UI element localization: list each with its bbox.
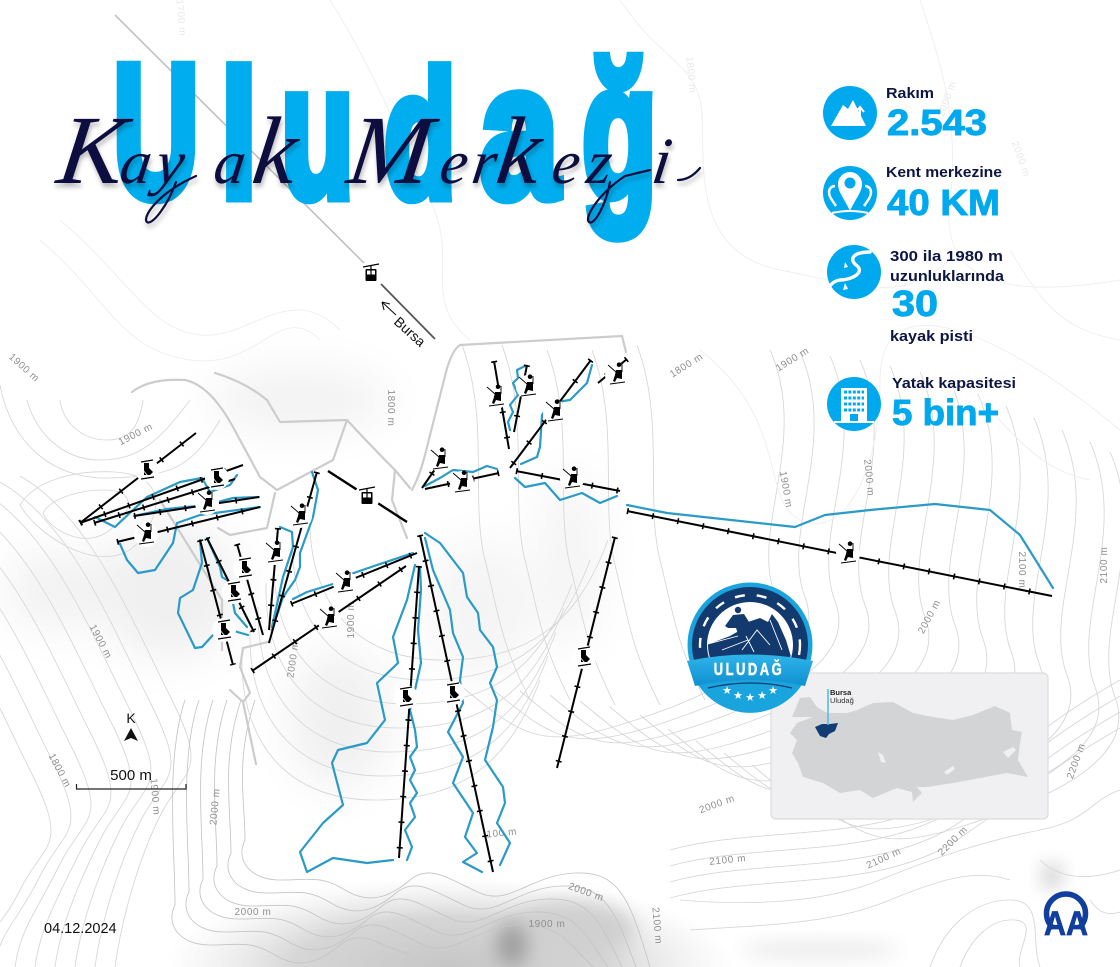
elevation labels: 2000 m: [916, 598, 943, 636]
subtitle: Kayak Merkezi: y: [146, 128, 190, 197]
badge: Uludağ: ★: [733, 690, 743, 702]
stat: ski runs: uzunluklarında: [890, 268, 1005, 285]
icon: location pins: [823, 166, 877, 220]
elevation labels: 2000 m: [286, 641, 302, 679]
elevation labels: 1900 m: [774, 345, 811, 374]
map label: [830, 688, 854, 705]
elevation labels: 1800 m: [385, 390, 396, 426]
map label: Bursa: [830, 688, 852, 697]
title: Uludağ: u: [281, 26, 354, 238]
subtitle: Kayak Merkezi: r: [468, 128, 503, 197]
title: Uludağ: l: [221, 35, 257, 236]
icon: cable car: [358, 261, 384, 287]
elevation labels: 2100 m: [1016, 552, 1027, 588]
elevation labels: 2100 m: [1099, 547, 1110, 583]
elevation labels: 2100 m: [649, 907, 664, 945]
badge: Uludağ: ★: [768, 685, 778, 697]
elevation labels: 1800 m: [668, 351, 705, 380]
elevation labels: 1900 m: [117, 421, 155, 448]
stat: altitude: [823, 85, 987, 143]
subtitle: Kayak Merkezi: e: [436, 128, 473, 197]
cable car line to Bursa: [115, 15, 435, 350]
badge: Uludağ: ★: [757, 690, 767, 702]
subtitle: Kayak Merkezi: e: [548, 128, 585, 197]
elevation labels: 1900 m: [346, 602, 357, 638]
stat: ski runs: 300 ila 1980 m: [890, 248, 1003, 265]
subtitle: Kayak Merkezi: a: [210, 128, 251, 197]
subtitle: Kayak Merkezi: [50, 96, 700, 222]
title: Uludağ: ğ: [582, 26, 657, 238]
icon: winding run: [827, 245, 881, 299]
north arrow: K: [126, 710, 136, 726]
title: Uludağ: d: [384, 35, 456, 236]
map label: Uludağ: [830, 696, 854, 705]
stat: distance to city centre: 40 KM: [887, 182, 1000, 223]
map: Bursa province: [815, 723, 838, 738]
title: Uludağ: [113, 26, 657, 238]
subtitle: Kayak Merkezi: K: [50, 96, 137, 205]
stat: altitude: 2.543: [887, 102, 987, 143]
elevation labels: 2000 m: [861, 459, 876, 497]
elevation labels: 2000 m: [567, 881, 605, 904]
subtitle: Kayak Merkezi: i: [648, 125, 676, 198]
arrow and label: Bursa: [382, 302, 429, 350]
stat: bed capacity: 5 bin+: [892, 392, 999, 433]
elevation labels: 2000 m: [235, 907, 271, 918]
subtitle: Kayak Merkezi: k: [491, 97, 551, 204]
elevation labels: 1900 m: [777, 470, 794, 509]
elevation labels: 1700 m: [173, 0, 188, 37]
elevation labels: 2100 m: [709, 853, 747, 868]
elevation labels: 100 m: [486, 826, 518, 841]
badge: Uludağ: ★: [745, 692, 755, 704]
stat: distance to city centre: Kent merkezine: [886, 164, 1002, 181]
badge: Uludağ: [687, 582, 813, 713]
locator map panel: [771, 673, 1048, 819]
subtitle: Kayak Merkezi: a: [116, 128, 157, 197]
north arrow: [124, 710, 138, 741]
stat: ski runs: 30: [892, 283, 938, 324]
date: 04.12.2024: [44, 921, 117, 937]
title: Uludağ: a: [480, 26, 560, 238]
elevation labels: 2100 m: [865, 846, 903, 872]
elevation labels: 1900 m: [147, 778, 162, 816]
icon: hotel building: [827, 377, 881, 431]
logo: AA: AA: [1044, 905, 1088, 943]
subtitle: Kayak Merkezi: z: [582, 128, 617, 197]
elevation labels: 1900 m: [529, 919, 565, 930]
badge: Uludağ: ★: [722, 685, 732, 697]
elevation labels: 1800 m: [46, 752, 73, 790]
stat: altitude: Rakım: [886, 85, 934, 102]
map pin line: [827, 689, 829, 725]
elevation labels: 2000 m: [1009, 140, 1032, 178]
stat: bed capacity: [827, 375, 1016, 433]
elevation labels: 1800 m: [683, 56, 698, 94]
map: Turkey: [790, 697, 1028, 802]
stat: ski runs: [827, 245, 1005, 345]
title: Uludağ: U: [113, 26, 199, 238]
stat: bed capacity: Yatak kapasitesi: [892, 375, 1016, 392]
scale bar: [76, 767, 186, 789]
subtitle: Kayak Merkezi: k: [247, 97, 307, 204]
roads: [132, 336, 626, 764]
elevation labels: 2000 m: [208, 788, 223, 826]
stat: distance to city centre: [823, 164, 1002, 223]
elevation labels: 2200 m: [1065, 742, 1088, 780]
ski runs: [95, 365, 1053, 872]
elevation labels: 2000 m: [936, 80, 959, 118]
arrow and label: Bursa: Bursa: [391, 313, 429, 350]
icon: mountain: [823, 86, 877, 140]
elevation labels: 2000 m: [698, 793, 736, 816]
elevation labels: 1900 m: [87, 623, 114, 661]
ski lifts with pylons: [80, 359, 1052, 872]
elevation labels: 1900 m: [6, 352, 41, 385]
lift icons: [134, 362, 860, 709]
badge: Uludağ: ULUDAĞ: [714, 658, 784, 680]
elevation labels: 2200 m: [936, 824, 970, 858]
scale bar: 500 m: [110, 767, 152, 784]
stat: ski runs: kayak pisti: [890, 328, 973, 345]
subtitle: Kayak Merkezi: M: [340, 96, 444, 205]
